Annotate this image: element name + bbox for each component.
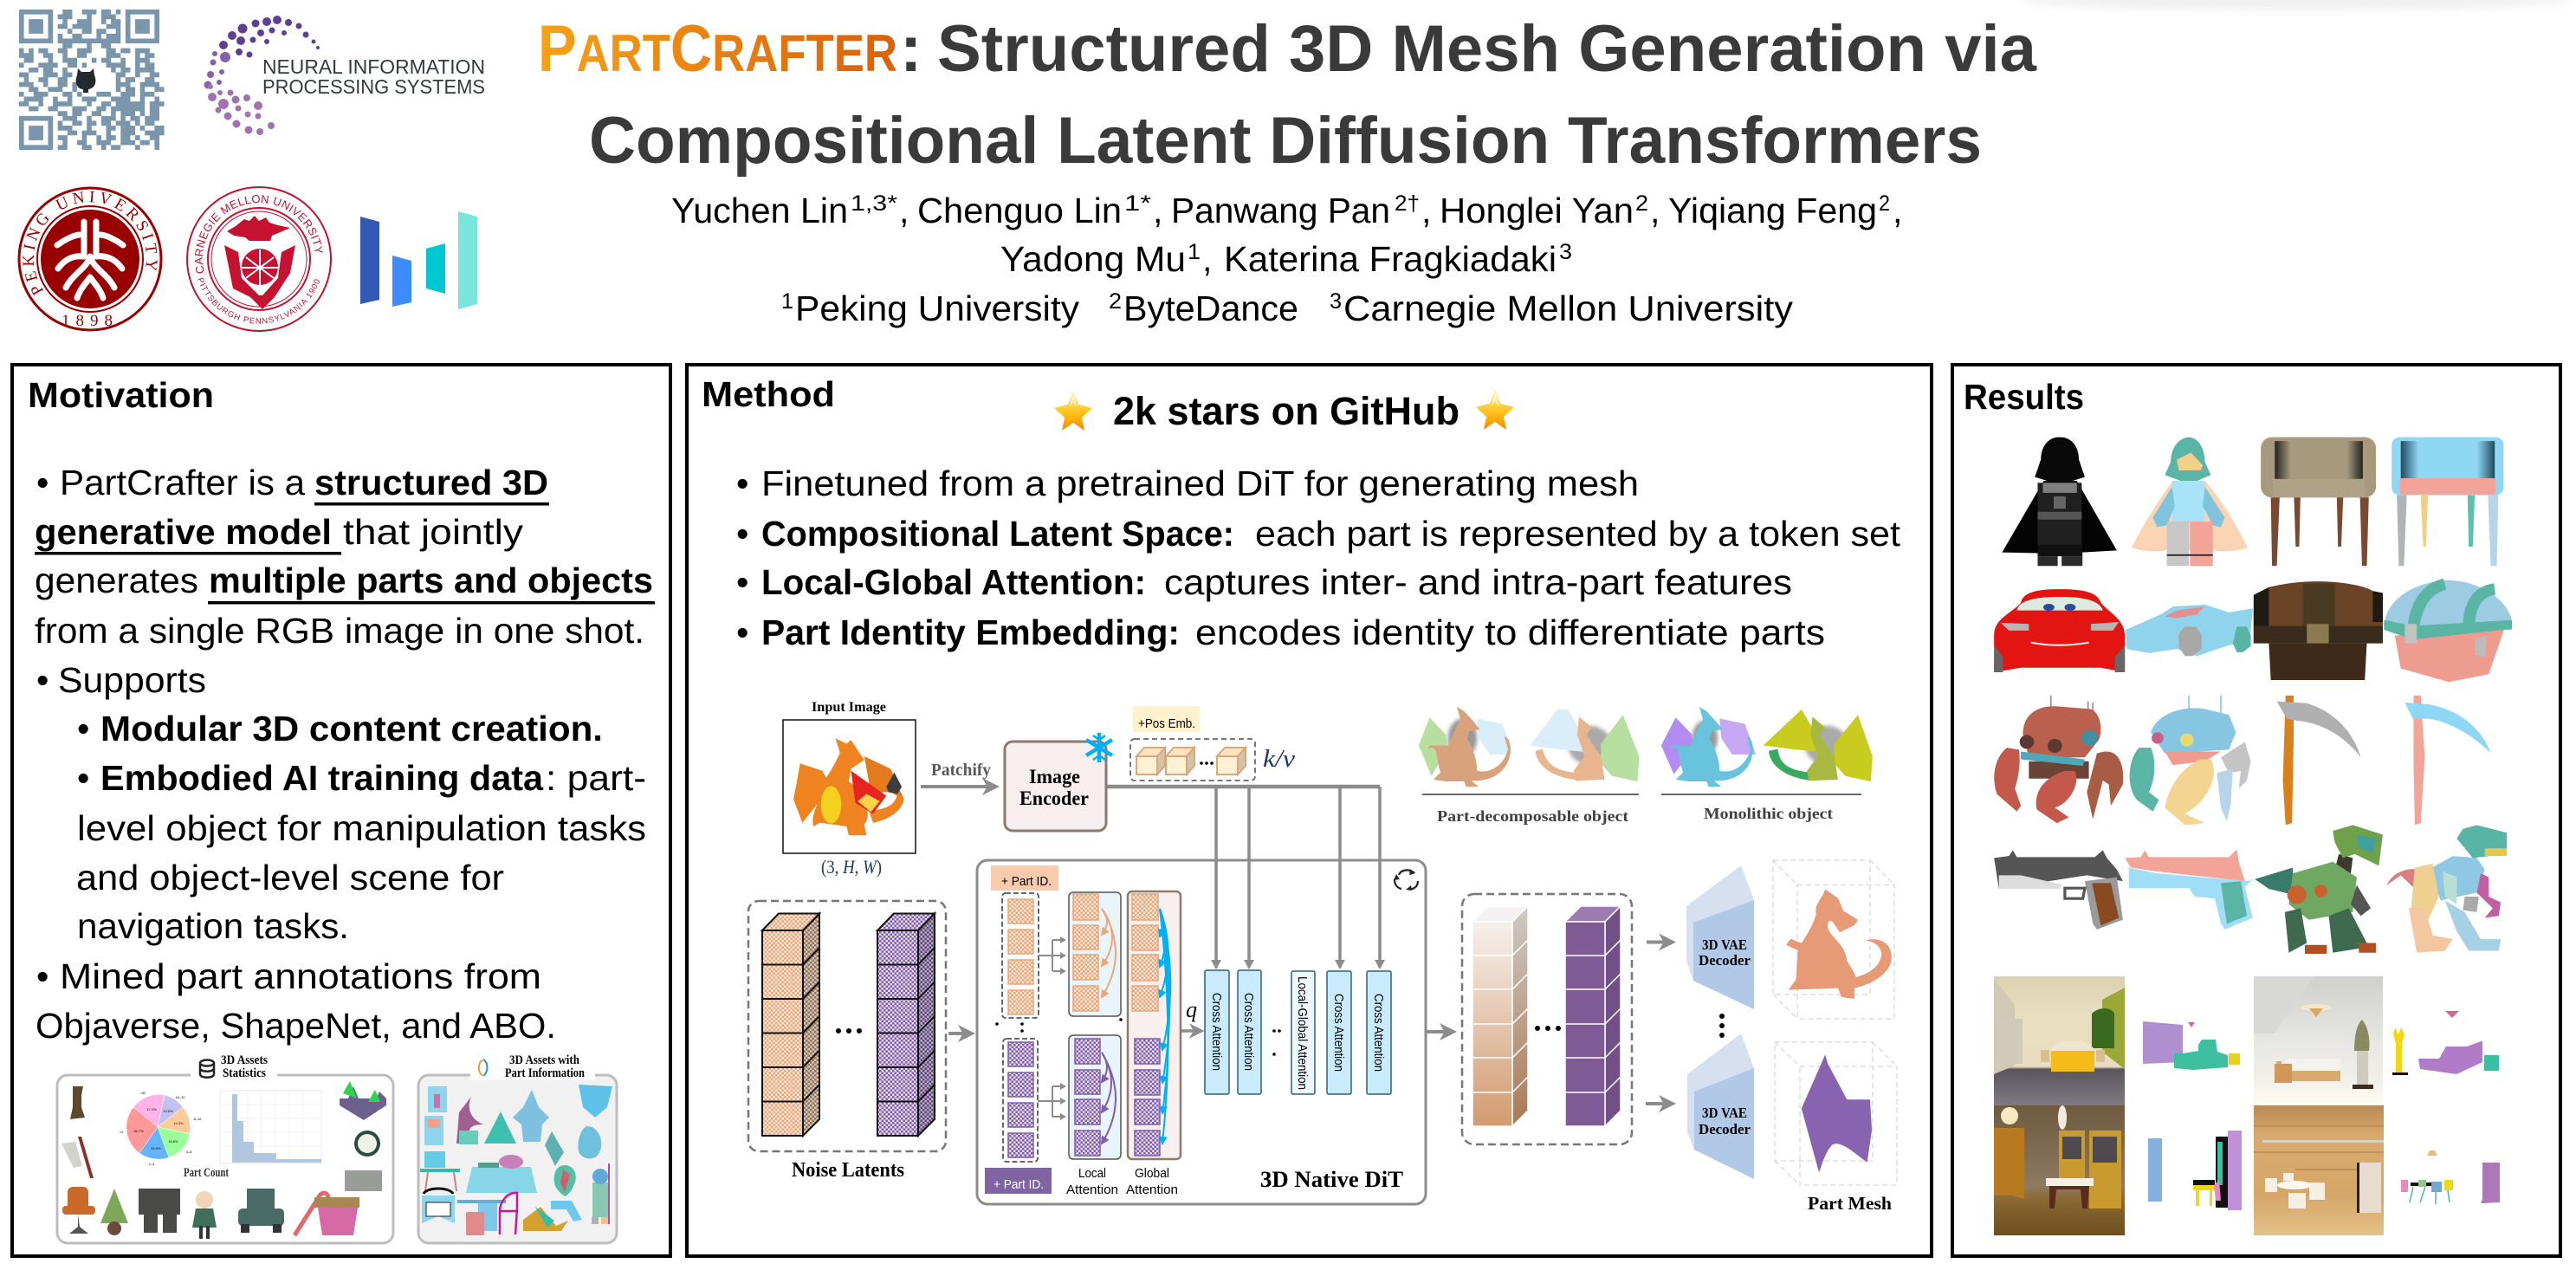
motivation text block: multiple parts and objects <box>209 560 653 600</box>
logo: Carnegie Mellon seal <box>186 186 332 332</box>
pie chart: 8–16 <box>194 1117 202 1121</box>
dashed token group bottom <box>1003 1039 1038 1162</box>
box: Pos Emb: +Pos Emb. <box>1138 716 1195 731</box>
label: Local Attention <box>1066 1166 1118 1197</box>
icon: GitHub cat <box>76 68 95 93</box>
icon: clock <box>354 1131 380 1157</box>
motivation text block: Embodied AI training data <box>100 758 544 798</box>
icon: mech <box>139 1189 180 1233</box>
local attention top <box>1069 892 1121 1016</box>
label: Input Image: Input Image <box>812 700 886 715</box>
method bullets: • <box>736 463 748 503</box>
seal inner line <box>37 206 143 312</box>
local attention bottom <box>1069 1035 1121 1159</box>
part mesh top <box>1773 860 1894 1019</box>
method bullets: Local-Global Attention: <box>761 562 1146 602</box>
bar 4 <box>458 211 477 309</box>
result: scene 1 parts <box>2143 1021 2240 1070</box>
label: Part Mesh: Part Mesh <box>1808 1193 1892 1214</box>
result: scene 4 parts <box>2401 1150 2500 1204</box>
author line 2: Yadong Mu <box>1000 239 1186 279</box>
pie chart: 10.6% <box>163 1109 173 1113</box>
pie chart: <2 <box>120 1130 124 1134</box>
sub-panel: 3D assets with part information <box>418 1053 617 1243</box>
result: pistol parts <box>2125 849 2255 930</box>
authors: 3 <box>1330 289 1342 314</box>
thistle hatch <box>241 249 279 286</box>
arrow: patchify <box>921 785 996 788</box>
thistle bulb <box>242 249 278 285</box>
dragon render 2 <box>1530 710 1640 781</box>
dragon render 4 <box>1764 710 1873 781</box>
motivation text block: generates <box>35 560 198 600</box>
seal text bottom: PITTSBURGH PENNSYLVANIA 1900 <box>197 277 320 324</box>
connector bottom <box>1038 1083 1066 1120</box>
orange latent stack <box>762 913 819 1136</box>
arrows: image features into cross attention <box>1107 787 1385 969</box>
result: robot dino <box>2255 825 2383 954</box>
bar 1 <box>360 217 379 304</box>
label: Local Attention: Attention <box>1066 1183 1118 1197</box>
motivation text block: • <box>77 758 89 798</box>
panel frame <box>12 365 670 1256</box>
label: Local Attention: Local <box>1078 1166 1106 1181</box>
result: dino parts <box>2387 825 2507 953</box>
result: lego parts <box>2132 437 2248 566</box>
pie chart: 16–32 <box>175 1095 185 1099</box>
icon: tree <box>100 1189 128 1235</box>
motivation text block: Mined part annotations from <box>60 956 541 996</box>
method bullets: encodes identity to differentiate parts <box>1195 612 1825 652</box>
chart label: Part Count <box>184 1166 229 1180</box>
decoder top <box>1686 865 1754 1009</box>
label: Part ID bottom: + Part ID. <box>994 1177 1044 1192</box>
authors: 1* <box>1124 191 1151 216</box>
result: scythe <box>2277 696 2361 825</box>
sub-panel: 3D assets statistics: Statistics <box>223 1066 266 1080</box>
noise latents <box>748 901 946 1151</box>
purple decoded stack <box>1565 906 1621 1126</box>
result: crab <box>1994 696 2123 823</box>
panel frame <box>1952 365 2560 1256</box>
icon: axe <box>61 1137 94 1178</box>
result: crab parts <box>2130 696 2251 825</box>
motivation text block: • <box>36 660 49 700</box>
arrow: DiT to decoded latents <box>1426 1030 1453 1033</box>
result: scene 3 image <box>1994 1105 2125 1235</box>
bar 3 <box>426 243 445 294</box>
ellipsis <box>836 1028 862 1033</box>
motivation text block: • <box>77 709 89 748</box>
authors: , <box>1893 191 1902 230</box>
thistle flower <box>227 216 290 241</box>
pie chart: 17.4% <box>146 1107 157 1111</box>
motivation text block: generative model <box>35 512 332 552</box>
label: Global Attention <box>1126 1166 1178 1197</box>
icon: floating island <box>340 1081 386 1120</box>
dots between decoders <box>1719 1014 1725 1038</box>
label: Global Attention: Attention <box>1126 1183 1178 1197</box>
heading: Motivation: Motivation <box>28 375 214 415</box>
authors: , <box>1153 191 1162 230</box>
seal disc <box>41 210 139 308</box>
motivation text block: Modular 3D content creation. <box>100 709 603 748</box>
ellipsis <box>1535 1026 1561 1031</box>
cross attention block 3 <box>1327 971 1351 1094</box>
result: Vader <box>2002 437 2117 566</box>
icon: cycle <box>1394 869 1418 891</box>
icon: snowflake <box>1086 733 1112 762</box>
decoder top: 3D VAE <box>1702 936 1747 953</box>
statistics heading: 3D Assets <box>221 1053 268 1067</box>
faint shadow at top edge <box>2018 0 2573 10</box>
dashed token group top <box>1002 893 1039 1018</box>
reference renders: part-decomposable and monolithic <box>1419 707 1873 825</box>
connector top <box>1039 936 1066 975</box>
part info frame <box>418 1075 617 1243</box>
result: blue car <box>2126 605 2253 656</box>
icon: pink chest <box>314 1197 359 1235</box>
authors: Chenguo Lin <box>917 191 1122 230</box>
motivation text block: : part- <box>546 758 646 798</box>
authors: Honglei Yan <box>1440 191 1634 230</box>
seal year: 1898 <box>61 312 119 330</box>
authors: Yiqiang Feng <box>1668 191 1877 230</box>
orange tokens <box>1008 899 1033 1014</box>
logo text line 2: PROCESSING SYSTEMS <box>262 75 485 98</box>
logo: NeurIPS <box>204 16 485 135</box>
authors: 1 <box>1188 240 1201 264</box>
authors: ByteDance <box>1123 288 1298 328</box>
arrow: to decoder bottom <box>1646 1102 1673 1105</box>
result: pistol <box>1994 850 2123 930</box>
thistle shield <box>224 245 295 309</box>
authors: , <box>1650 191 1660 230</box>
heading: Results: Results <box>1964 377 2084 417</box>
panel frame <box>687 365 1932 1256</box>
logo text line 1: NEURAL INFORMATION <box>262 55 485 78</box>
icon: glowing star right <box>1476 390 1514 430</box>
cross attention block 4 <box>1367 971 1391 1094</box>
seal outer ring <box>187 187 331 331</box>
result: scene 1 image <box>1994 976 2125 1105</box>
decoder bottom: Decoder <box>1699 1121 1751 1137</box>
authors: , <box>1202 239 1212 279</box>
label: Part ID bottom <box>985 1168 1052 1194</box>
diagram: architecture <box>748 700 1897 1214</box>
input image frame <box>783 720 916 853</box>
label: part-decomposable: Part-decomposable object <box>1437 807 1628 825</box>
pie chart: 15.5% <box>151 1146 161 1150</box>
part info heading: 3D Assets with <box>509 1053 580 1067</box>
bar 2 <box>392 256 411 307</box>
label: Noise Latents: Noise Latents <box>792 1159 904 1182</box>
label: monolithic: Monolithic object <box>1704 805 1833 822</box>
box: 3D Native DiT <box>977 860 1426 1204</box>
result: chest parts <box>2384 580 2512 682</box>
logo: Peking University seal <box>17 187 163 331</box>
icon: database <box>200 1060 214 1078</box>
result: chair <box>2261 437 2376 566</box>
title line 2: Compositional Latent Diffusion Transformers <box>589 104 1982 178</box>
result: scythe parts <box>2404 696 2491 825</box>
seal glyph <box>57 222 123 298</box>
cross attention block 2 <box>1238 970 1261 1094</box>
icon: glowing star left <box>1054 391 1092 431</box>
result: scene 4 image <box>2254 1105 2384 1235</box>
icon: brain <box>479 1059 487 1076</box>
result: scene 2 parts <box>2392 1011 2499 1075</box>
method bullets: Compositional Latent Space: <box>761 514 1234 554</box>
result: scene 2 image <box>2254 976 2383 1105</box>
result: chest <box>2254 581 2383 680</box>
image tokens <box>1130 739 1255 781</box>
label: 3D Native DiT: 3D Native DiT <box>1260 1167 1403 1192</box>
method bullets: each part is represented by a token set <box>1255 514 1901 554</box>
result: scene 3 parts <box>2148 1131 2242 1210</box>
local-global attention block: Local-Global Attention <box>1295 976 1310 1090</box>
cross attention block 3: Cross Attention <box>1331 994 1346 1072</box>
github stars banner <box>1054 389 1514 433</box>
result objects grid <box>1994 437 2512 954</box>
cross attention block 2: Cross Attention <box>1241 993 1256 1071</box>
motivation text block <box>35 463 655 1046</box>
icon: orange chair <box>62 1187 95 1234</box>
motivation text block: structured 3D <box>314 463 548 502</box>
purple latent stack <box>877 913 935 1136</box>
panel: Method <box>687 365 1932 1256</box>
statistics frame <box>57 1075 393 1243</box>
logo dots <box>204 16 320 135</box>
seal ring <box>19 188 161 330</box>
result: red car <box>1994 589 2125 672</box>
motivation text block: PartCrafter is a <box>60 463 305 502</box>
cross attention block 1 <box>1205 970 1229 1094</box>
dots between groups <box>995 1017 1147 1033</box>
title colon: : <box>900 12 922 86</box>
cross attention block 1: Cross Attention <box>1209 993 1224 1071</box>
title line 1 name: PARTCRAFTER <box>538 12 897 86</box>
dots between blocks <box>1272 1029 1281 1056</box>
result: chair parts <box>2392 437 2503 566</box>
purple tokens <box>1008 1042 1033 1157</box>
label: Global Attention: Global <box>1135 1166 1169 1181</box>
pie chart: 2–4 <box>149 1162 155 1166</box>
authors: Peking University <box>795 288 1080 328</box>
divider: monolithic <box>1661 794 1861 795</box>
pie chart: 15.6% <box>168 1139 178 1144</box>
part info heading backdrop <box>470 1053 595 1080</box>
authors: Carnegie Mellon University <box>1343 288 1794 328</box>
method bullets: Part Identity Embedding: <box>761 612 1180 652</box>
authors: 2 <box>1109 289 1122 314</box>
authors: Katerina Fragkiadaki <box>1224 239 1557 279</box>
icon: truck <box>238 1189 284 1233</box>
arrow: latents to DiT <box>948 1032 972 1035</box>
local-global attention block <box>1291 971 1315 1094</box>
banner text: 2k stars on GitHub <box>1113 389 1460 433</box>
icon: machine <box>345 1170 382 1191</box>
authors: 2† <box>1395 191 1420 216</box>
title line 1: Structured 3D Mesh Generation via <box>937 12 2037 86</box>
authors <box>671 191 1902 328</box>
icon: chess rook <box>70 1086 85 1119</box>
sub-panel: 3D assets with part information: Part Information <box>505 1066 586 1080</box>
seal inner ring 2 <box>211 211 307 307</box>
label: k/v: k/v <box>1263 745 1295 773</box>
motivation text block: • <box>36 956 49 996</box>
input image dragon <box>793 738 904 835</box>
method bullets: Finetuned from a pretrained DiT for generating mesh <box>761 463 1639 503</box>
global attention column <box>1128 891 1181 1159</box>
box: Pos Emb <box>1133 706 1200 732</box>
box: Image Encoder: Encoder <box>1019 787 1089 809</box>
seal text top: PEKING UNIVERSITY <box>23 191 158 296</box>
dragon render 1 <box>1419 707 1512 787</box>
decoder top: Decoder <box>1699 952 1751 969</box>
motivation text block: that jointly <box>343 512 524 552</box>
label: input shape: (3, H, W) <box>821 856 882 878</box>
icon: candy cane <box>294 1193 328 1235</box>
heading: Method: Method <box>702 374 835 414</box>
sub-panel: 3D assets statistics <box>57 1053 393 1243</box>
motivation text block: navigation tasks. <box>77 906 349 946</box>
divider: part-decomposable <box>1422 794 1639 795</box>
decoded latents <box>1462 894 1632 1144</box>
decoder bottom <box>1687 1033 1754 1179</box>
motivation text block: and object-level scene for <box>76 858 504 897</box>
label: Patchify: Patchify <box>931 761 991 780</box>
label: Part ID top: + Part ID. <box>1001 874 1052 889</box>
box: Image Encoder <box>1005 742 1106 831</box>
part objects <box>420 1085 612 1235</box>
dragon render 3 <box>1661 707 1756 787</box>
motivation text block: Objaverse, ShapeNet, and ABO. <box>36 1006 556 1046</box>
author line 1: Yuchen Lin <box>671 191 848 230</box>
pie chart: 4–8 <box>186 1150 192 1154</box>
arrow: to decoder top <box>1647 941 1673 944</box>
authors: 3 <box>1559 240 1572 264</box>
label: Part ID top <box>991 865 1058 891</box>
method bullets: captures inter- and intra-part features <box>1164 562 1792 602</box>
authors: 2 <box>1635 191 1648 216</box>
bar chart <box>220 1091 321 1163</box>
label: q: q <box>1186 997 1197 1022</box>
method bullets <box>736 463 1901 652</box>
motivation text block: Supports <box>58 660 206 700</box>
icon: girl <box>192 1191 217 1239</box>
motivation text block: • <box>36 463 49 502</box>
orange decoded stack <box>1472 906 1528 1126</box>
pie chart: 14.3% <box>173 1121 184 1125</box>
decoder bottom: 3D VAE <box>1702 1105 1747 1121</box>
authors: , <box>1421 191 1431 230</box>
authors: Panwang Pan <box>1171 191 1390 230</box>
method bullets: • <box>736 612 748 652</box>
authors: 2 <box>1879 191 1890 216</box>
icon: QR code <box>19 10 165 150</box>
seal inner ring <box>208 208 310 310</box>
method bullets: • <box>736 514 748 554</box>
affiliations: 1 <box>781 289 793 314</box>
arrow: q <box>1181 1029 1201 1033</box>
panel: Results <box>1952 365 2560 1256</box>
logo: ByteDance bars <box>360 211 477 309</box>
authors: 1,3* <box>851 191 897 216</box>
cross attention block 4: Cross Attention <box>1371 994 1386 1072</box>
pie chart: 26.7% <box>133 1129 144 1133</box>
seal text top: CARNEGIE MELLON UNIVERSITY <box>195 195 323 274</box>
pie chart: >32 <box>140 1091 146 1095</box>
method bullets: • <box>736 562 748 602</box>
motivation text block: level object for manipulation tasks <box>77 808 646 848</box>
authors: , <box>899 191 909 230</box>
heading backdrop <box>191 1053 277 1084</box>
motivation text block: from a single RGB image in one shot. <box>35 611 644 651</box>
part mesh bottom <box>1775 1042 1897 1185</box>
box: Image Encoder: Image <box>1029 766 1080 787</box>
panel: Motivation <box>12 365 670 1256</box>
pie chart <box>120 1091 202 1166</box>
title <box>538 12 2037 178</box>
